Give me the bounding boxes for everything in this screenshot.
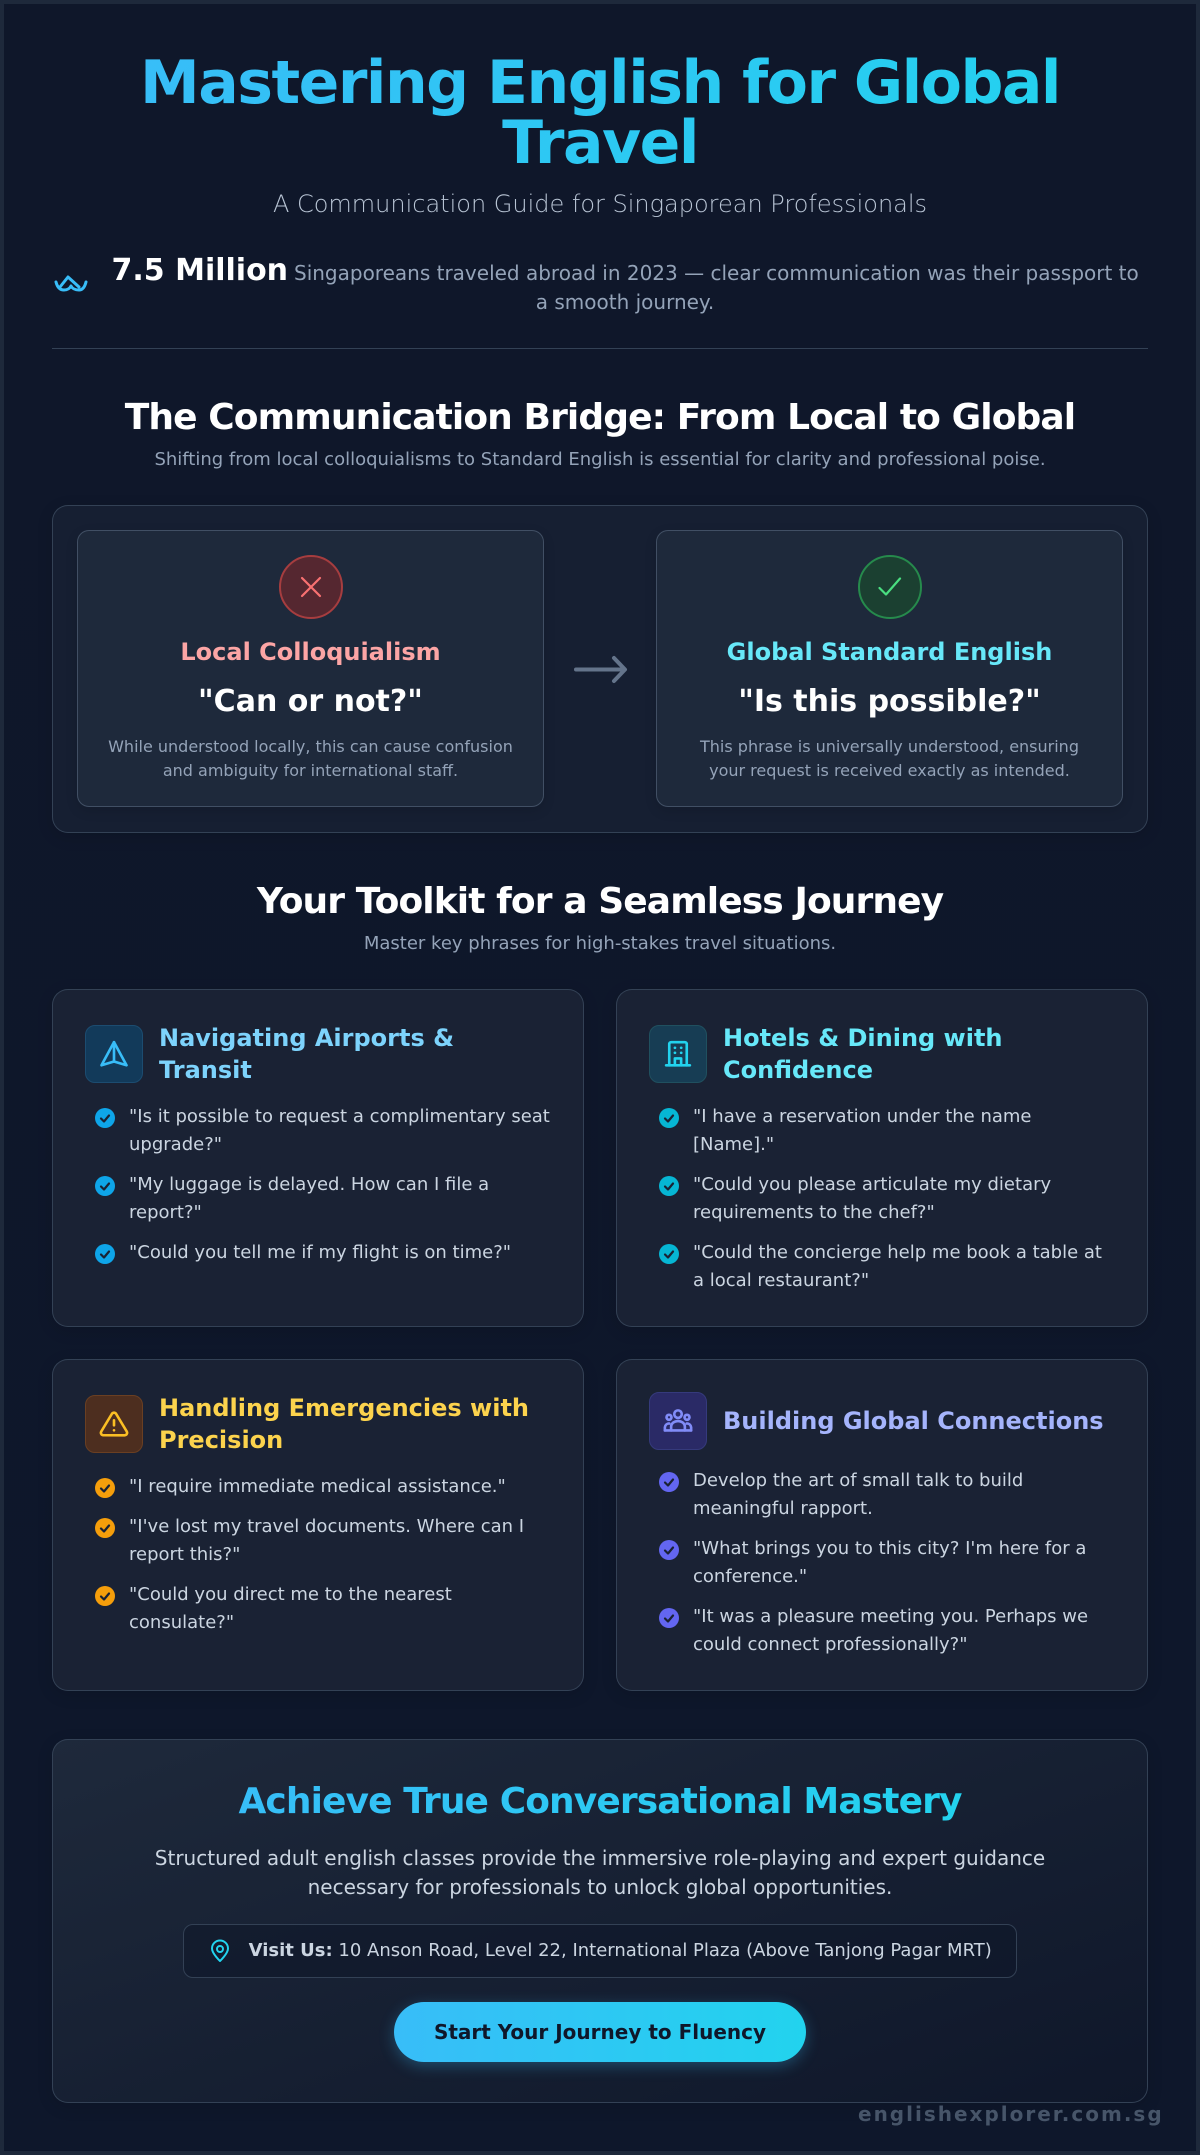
phrase: "It was a pleasure meeting you. Perhaps we (693, 1606, 1088, 1627)
heading: communication bridge: The Communication Bridge: From Local to Global (125, 397, 1075, 438)
explanation: This phrase is universally understood, ensuring (700, 737, 1079, 756)
phrase: "Is it possible to request a complimentary seat (129, 1106, 550, 1127)
phrase (693, 1242, 1102, 1291)
cta paragraph: Structured adult english classes provide the immersive role-playing and expert guidance (155, 1846, 1045, 1870)
check (659, 1608, 679, 1628)
card title: Hotels & Dining with (723, 1024, 1003, 1052)
explanation (700, 737, 1079, 780)
phrase (693, 1106, 1032, 1155)
card: local colloquialism (77, 530, 544, 807)
phrase: "Could you direct me to the nearest (129, 1584, 452, 1605)
panel: airports (52, 989, 584, 1327)
description line one: Singaporeans traveled abroad in 2023 — clear communication was their passport to (294, 261, 1139, 285)
phrase: report?" (129, 1202, 202, 1223)
check (659, 1540, 679, 1560)
phrase: conference." (693, 1566, 807, 1587)
cta heading: Achieve True Conversational Mastery (238, 1781, 962, 1822)
icon: people (649, 1392, 707, 1450)
check (95, 1176, 115, 1196)
check (95, 1518, 115, 1538)
check (659, 1472, 679, 1492)
check (659, 1244, 679, 1264)
phrase (129, 1516, 524, 1565)
phrase: [Name]." (693, 1134, 774, 1155)
label: Global Standard English (727, 638, 1052, 666)
phrase: could connect professionally?" (693, 1634, 968, 1655)
check (95, 1586, 115, 1606)
phrase: report this?" (129, 1544, 240, 1565)
phrase (693, 1470, 1023, 1519)
stat number: 7.5 Million (112, 253, 288, 288)
card title (159, 1024, 454, 1084)
phrase (693, 1538, 1086, 1587)
card title: Confidence (723, 1056, 873, 1084)
icon: check (858, 555, 922, 619)
label: Local Colloquialism (180, 638, 441, 666)
button (394, 2002, 806, 2062)
card title: Building Global Connections (723, 1407, 1104, 1435)
phrase: "Could you please articulate my dietary (693, 1174, 1051, 1195)
phrase: requirements to the chef?" (693, 1202, 935, 1223)
stat block (54, 253, 1139, 314)
panel: connections (616, 1359, 1148, 1691)
icon: navigation (85, 1025, 143, 1083)
section intro: bridge: Shifting from local colloquialisms to Standard English is essential for clarity and professional poise. (154, 449, 1046, 470)
phrase: "Is this possible?" (738, 684, 1041, 719)
phrase: Develop the art of small talk to build (693, 1470, 1023, 1491)
phrase: meaningful rapport. (693, 1498, 873, 1519)
panel: hotels (616, 989, 1148, 1327)
subtitle: A Communication Guide for Singaporean Professionals (273, 190, 927, 218)
cta paragraph (155, 1846, 1045, 1899)
panel: emergencies (52, 1359, 584, 1691)
card title: Transit (159, 1056, 252, 1084)
panel: communication bridge (52, 505, 1148, 833)
phrase: "My luggage is delayed. How can I file a (129, 1174, 489, 1195)
phrase: a local restaurant?" (693, 1270, 869, 1291)
icon: building (649, 1025, 707, 1083)
card: global standard english (656, 530, 1123, 807)
card title: Precision (159, 1426, 283, 1454)
panel: call to action (52, 1739, 1148, 2103)
phrase: "I have a reservation under the name (693, 1106, 1032, 1127)
card title (723, 1024, 1003, 1084)
card title: Navigating Airports & (159, 1024, 454, 1052)
section intro: toolkit: Master key phrases for high-stakes travel situations. (364, 932, 836, 954)
cta paragraph: necessary for professionals to unlock global opportunities. (308, 1875, 892, 1899)
check (659, 1176, 679, 1196)
check (95, 1478, 115, 1498)
phrase (129, 1174, 489, 1223)
phrase: "I've lost my travel documents. Where can I (129, 1516, 524, 1537)
phrase (693, 1174, 1051, 1223)
phrase: upgrade?" (129, 1134, 222, 1155)
phrase: "I require immediate medical assistance." (129, 1476, 506, 1497)
phrase: consulate?" (129, 1612, 234, 1633)
explanation: and ambiguity for international staff. (163, 761, 458, 780)
phrase: "Could the concierge help me book a table at (693, 1242, 1102, 1263)
title (140, 53, 1060, 173)
title: Travel (502, 108, 698, 178)
phrase (693, 1606, 1088, 1655)
heading: toolkit: Your Toolkit for a Seamless Journey (257, 881, 943, 922)
explanation: While understood locally, this can cause confusion (108, 737, 513, 756)
explanation (108, 737, 513, 780)
address box (183, 1924, 1017, 1978)
phrase: "Could you tell me if my flight is on time?" (129, 1242, 511, 1263)
icon: ship on waves (54, 275, 88, 292)
card title (159, 1394, 529, 1454)
icon: cross (279, 555, 343, 619)
icon: warning (85, 1395, 143, 1453)
stat description (294, 261, 1139, 314)
check (95, 1108, 115, 1128)
phrase: "What brings you to this city? I'm here for a (693, 1538, 1086, 1559)
phrase (129, 1106, 550, 1155)
explanation: your request is received exactly as intended. (709, 761, 1070, 780)
icon: map pin (211, 1940, 229, 1962)
phrase: "Can or not?" (198, 684, 423, 719)
check (659, 1108, 679, 1128)
watermark: englishexplorer.com.sg (858, 2102, 1164, 2126)
title: Mastering English for Global (140, 48, 1060, 118)
address text: Visit Us: 10 Anson Road, Level 22, International Plaza (Above Tanjong Pagar MRT) (249, 1940, 992, 1961)
description line two: a smooth journey. (536, 290, 714, 314)
card title: Handling Emergencies with (159, 1394, 529, 1422)
button: Start Your Journey to Fluency (434, 2020, 766, 2044)
phrase (129, 1584, 452, 1633)
check (95, 1244, 115, 1264)
header divider (52, 348, 1148, 349)
arrow (574, 656, 627, 684)
